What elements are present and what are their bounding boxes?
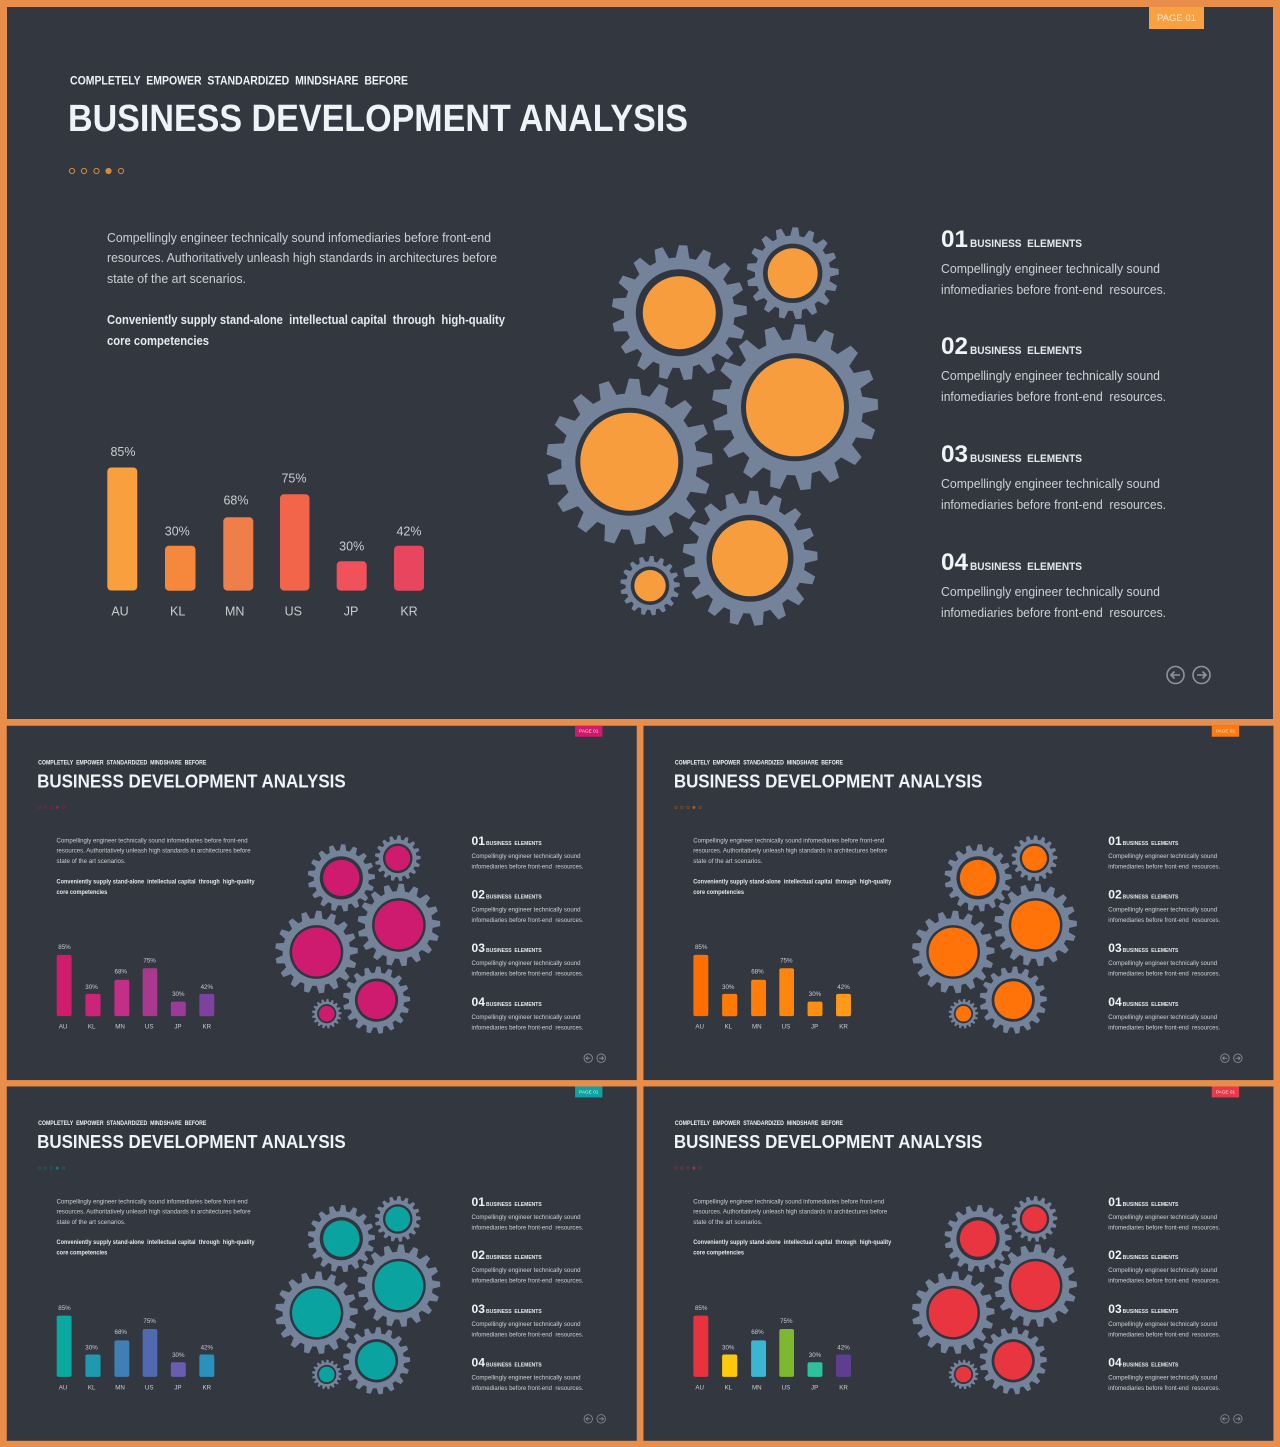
bar chart: KL <box>170 604 185 618</box>
bar chart: 68% <box>115 968 127 975</box>
element list: Compellingly engineer technically sound <box>1108 853 1218 860</box>
bar chart: 30% <box>165 524 190 538</box>
bar chart: 30% <box>809 1352 822 1359</box>
bar chart: KL <box>725 1024 733 1031</box>
element list: BUSINESS ELEMENTS <box>1123 841 1179 847</box>
intro text: Conveniently supply stand-alone intellectual capital through high-quality <box>107 313 505 327</box>
element list: 04 <box>472 1356 485 1370</box>
element list: Compellingly engineer technically sound <box>941 369 1160 383</box>
element list: 01 <box>1108 1195 1122 1209</box>
bar chart: 85% <box>110 445 136 459</box>
bar chart: 42% <box>837 1344 850 1351</box>
gear cluster <box>543 225 881 629</box>
title: BUSINESS DEVELOPMENT ANALYSIS <box>68 98 688 140</box>
element list: BUSINESS ELEMENTS <box>1123 1363 1179 1369</box>
bar chart: KR <box>400 604 418 618</box>
element list: BUSINESS ELEMENTS <box>1123 1309 1179 1315</box>
bar chart: JP <box>811 1384 818 1391</box>
intro text: Conveniently supply stand-alone intellectual capital through high-quality <box>57 1239 255 1246</box>
element list: 04 <box>472 995 485 1009</box>
subtitle: COMPLETELY EMPOWER STANDARDIZED MINDSHARE BEFORE <box>38 1121 206 1127</box>
element list: Compellingly engineer technically sound <box>472 906 581 913</box>
element list: 02 <box>472 887 485 901</box>
intro text <box>693 1198 892 1257</box>
bar chart: 75% <box>143 957 156 964</box>
intro text <box>107 231 505 348</box>
element list: 01 <box>472 1195 485 1209</box>
intro text: state of the art scenarios. <box>57 1219 126 1226</box>
element list: 04 <box>941 549 969 576</box>
element list: 02 <box>472 1248 485 1262</box>
intro text <box>57 1198 255 1257</box>
page tag: PAGE 01 <box>579 1089 599 1095</box>
bar chart: US <box>782 1384 790 1391</box>
pagination dots <box>38 806 65 809</box>
subtitle: COMPLETELY EMPOWER STANDARDIZED MINDSHARE BEFORE <box>675 1121 843 1127</box>
element list: Compellingly engineer technically sound <box>1108 906 1218 913</box>
bar chart <box>693 944 851 1031</box>
element list: Compellingly engineer technically sound <box>941 585 1160 599</box>
element list: 03 <box>472 1302 485 1316</box>
intro text: state of the art scenarios. <box>57 858 126 865</box>
intro text: Compellingly engineer technically sound infomediaries before front-end <box>107 231 491 245</box>
element list <box>1108 1195 1220 1392</box>
bar chart: AU <box>59 1024 68 1031</box>
bar chart: 68% <box>115 1329 127 1336</box>
page tag: PAGE 01 <box>579 729 599 735</box>
bar chart: 68% <box>223 494 249 508</box>
page tag <box>575 1086 602 1097</box>
element list: 04 <box>1108 995 1122 1009</box>
subtitle: COMPLETELY EMPOWER STANDARDIZED MINDSHARE BEFORE <box>675 760 843 766</box>
intro text: core competencies <box>107 334 209 348</box>
bar chart: KR <box>202 1384 212 1391</box>
bar chart: MN <box>752 1384 762 1391</box>
element list: BUSINESS ELEMENTS <box>486 1363 542 1369</box>
element list: BUSINESS ELEMENTS <box>1123 1202 1179 1208</box>
bar chart: 42% <box>201 984 214 991</box>
intro text: Compellingly engineer technically sound infomediaries before front-end <box>693 1198 885 1205</box>
element list: BUSINESS ELEMENTS <box>970 561 1082 573</box>
bar chart: 75% <box>143 1318 156 1325</box>
element list: infomediaries before front-end resources. <box>472 864 584 871</box>
intro text: resources. Authoritatively unleash high standards in architectures before <box>107 251 497 265</box>
element list: Compellingly engineer technically sound <box>1108 1267 1218 1274</box>
intro text: Compellingly engineer technically sound infomediaries before front-end <box>693 838 885 845</box>
element list: infomediaries before front-end resources. <box>472 1385 584 1392</box>
title: BUSINESS DEVELOPMENT ANALYSIS <box>37 771 346 792</box>
element list: infomediaries before front-end resources. <box>472 917 584 924</box>
element list: infomediaries before front-end resources. <box>941 283 1166 297</box>
bar chart: AU <box>695 1384 705 1391</box>
intro text: resources. Authoritatively unleash high standards in architectures before <box>693 1208 888 1215</box>
bar chart: JP <box>344 604 358 618</box>
intro text: core competencies <box>693 1250 744 1257</box>
bar chart: AU <box>59 1384 68 1391</box>
element list: Compellingly engineer technically sound <box>1108 1214 1218 1221</box>
element list: 01 <box>941 226 968 253</box>
element list: 03 <box>472 941 485 955</box>
bar chart: MN <box>225 604 244 618</box>
element list: Compellingly engineer technically sound <box>941 262 1160 276</box>
element list <box>472 1195 584 1392</box>
navigation arrows <box>1221 1054 1242 1062</box>
bar chart: 85% <box>58 944 71 951</box>
bar chart <box>57 1305 214 1391</box>
bar chart: US <box>285 604 302 618</box>
pagination dots <box>675 806 702 809</box>
bar chart: 30% <box>172 991 185 998</box>
element list: infomediaries before front-end resources. <box>1108 1224 1220 1231</box>
intro text: state of the art scenarios. <box>107 272 246 286</box>
element list: Compellingly engineer technically sound <box>472 1267 581 1274</box>
intro text: core competencies <box>693 889 744 896</box>
element list: 01 <box>1108 834 1122 848</box>
intro text: Compellingly engineer technically sound infomediaries before front-end <box>57 838 248 845</box>
bar chart: US <box>145 1024 154 1031</box>
bar chart: 42% <box>201 1344 214 1351</box>
bar chart: 68% <box>751 968 764 975</box>
slide: orange variant <box>643 726 1273 1080</box>
element list: 03 <box>1108 1302 1122 1316</box>
pagination dots <box>38 1167 65 1169</box>
element list: Compellingly engineer technically sound <box>472 853 581 860</box>
element list: Compellingly engineer technically sound <box>472 1214 581 1221</box>
title: BUSINESS DEVELOPMENT ANALYSIS <box>674 1132 982 1153</box>
intro text: Conveniently supply stand-alone intellectual capital through high-quality <box>693 879 892 886</box>
element list: BUSINESS ELEMENTS <box>486 841 542 847</box>
bar chart: 75% <box>780 1318 793 1325</box>
element list: BUSINESS ELEMENTS <box>1123 894 1179 900</box>
bar chart: 85% <box>695 1305 708 1312</box>
page tag: PAGE 01 <box>1216 729 1235 735</box>
element list: Compellingly engineer technically sound <box>472 1014 581 1021</box>
bar chart <box>57 944 214 1031</box>
page tag: PAGE 01 <box>1157 13 1196 24</box>
navigation arrows <box>584 1415 605 1423</box>
element list: BUSINESS ELEMENTS <box>1123 1002 1179 1008</box>
element list <box>941 226 1166 620</box>
bar chart: US <box>145 1384 154 1391</box>
element list: infomediaries before front-end resources. <box>1108 1278 1220 1285</box>
bar chart: MN <box>115 1384 125 1391</box>
element list: Compellingly engineer technically sound <box>1108 960 1218 967</box>
element list: infomediaries before front-end resources. <box>472 971 584 978</box>
element list: infomediaries before front-end resources. <box>1108 1024 1220 1031</box>
slide: red variant <box>643 1086 1273 1441</box>
element list: 03 <box>1108 941 1122 955</box>
element list: Compellingly engineer technically sound <box>472 1321 581 1328</box>
title: BUSINESS DEVELOPMENT ANALYSIS <box>674 771 982 792</box>
intro text: resources. Authoritatively unleash high standards in architectures before <box>57 1208 251 1215</box>
gear cluster <box>910 834 1078 1035</box>
intro text: Compellingly engineer technically sound infomediaries before front-end <box>57 1198 248 1205</box>
bar chart: 30% <box>722 984 735 991</box>
bar chart: US <box>782 1024 790 1031</box>
bar chart: 75% <box>780 957 793 964</box>
navigation arrows <box>1167 666 1210 684</box>
bar chart: JP <box>174 1384 182 1391</box>
element list: BUSINESS ELEMENTS <box>970 238 1082 250</box>
bar chart: 30% <box>339 540 364 554</box>
element list: infomediaries before front-end resources. <box>1108 864 1220 871</box>
page tag <box>1212 726 1239 737</box>
page tag <box>1149 7 1204 29</box>
bar chart: KL <box>725 1384 733 1391</box>
element list: infomediaries before front-end resources. <box>1108 1331 1220 1338</box>
intro text: core competencies <box>57 889 108 896</box>
intro text: Conveniently supply stand-alone intellectual capital through high-quality <box>57 879 255 886</box>
element list: infomediaries before front-end resources. <box>472 1331 584 1338</box>
gear cluster <box>274 834 442 1035</box>
slide: main orange <box>7 7 1273 719</box>
page tag <box>575 726 602 737</box>
element list: BUSINESS ELEMENTS <box>486 1255 542 1261</box>
subtitle: COMPLETELY EMPOWER STANDARDIZED MINDSHARE BEFORE <box>38 760 206 766</box>
bar chart: 30% <box>809 991 822 998</box>
bar chart: KR <box>839 1024 848 1031</box>
element list: infomediaries before front-end resources. <box>1108 917 1220 924</box>
element list: Compellingly engineer technically sound <box>472 1375 581 1382</box>
intro text: state of the art scenarios. <box>693 1219 763 1226</box>
bar chart: 42% <box>396 524 422 538</box>
intro text: core competencies <box>57 1250 108 1257</box>
bar chart: 85% <box>695 944 708 951</box>
element list: infomediaries before front-end resources. <box>941 606 1166 620</box>
element list: BUSINESS ELEMENTS <box>970 345 1082 357</box>
bar chart: 30% <box>85 984 98 991</box>
bar chart: JP <box>174 1024 182 1031</box>
bar chart: 68% <box>751 1329 764 1336</box>
bar chart: MN <box>115 1024 125 1031</box>
element list: 02 <box>1108 887 1122 901</box>
bar chart <box>107 445 424 618</box>
element list: Compellingly engineer technically sound <box>1108 1014 1218 1021</box>
bar chart: 85% <box>58 1305 71 1312</box>
element list: BUSINESS ELEMENTS <box>486 1309 542 1315</box>
element list: 03 <box>941 441 968 468</box>
page tag <box>1212 1086 1239 1097</box>
gear cluster <box>274 1195 442 1396</box>
bar chart: 30% <box>85 1344 98 1351</box>
element list: 01 <box>472 834 485 848</box>
gear cluster <box>910 1195 1078 1396</box>
element list: Compellingly engineer technically sound <box>1108 1375 1218 1382</box>
element list: infomediaries before front-end resources. <box>941 498 1166 512</box>
page tag: PAGE 01 <box>1216 1089 1235 1095</box>
element list: BUSINESS ELEMENTS <box>970 453 1082 465</box>
bar chart: KL <box>88 1024 96 1031</box>
slide: magenta variant <box>7 726 637 1080</box>
bar chart: AU <box>695 1024 705 1031</box>
subtitle: COMPLETELY EMPOWER STANDARDIZED MINDSHARE BEFORE <box>70 74 408 88</box>
bar chart: KR <box>839 1384 848 1391</box>
element list: 02 <box>1108 1248 1122 1262</box>
bar chart: 30% <box>172 1352 185 1359</box>
bar chart: JP <box>811 1024 818 1031</box>
element list: BUSINESS ELEMENTS <box>1123 1255 1179 1261</box>
intro text: Conveniently supply stand-alone intellectual capital through high-quality <box>693 1239 892 1246</box>
bar chart: MN <box>752 1024 762 1031</box>
pagination dots <box>675 1167 702 1169</box>
element list: infomediaries before front-end resources. <box>941 390 1166 404</box>
element list: BUSINESS ELEMENTS <box>486 948 542 954</box>
pagination dots <box>69 168 124 174</box>
element list: BUSINESS ELEMENTS <box>486 1002 542 1008</box>
bar chart: AU <box>111 604 129 618</box>
intro text <box>693 838 892 896</box>
element list: BUSINESS ELEMENTS <box>486 1202 542 1208</box>
element list: 04 <box>1108 1356 1122 1370</box>
bar chart: 42% <box>837 984 850 991</box>
bar chart <box>693 1305 851 1391</box>
element list: BUSINESS ELEMENTS <box>1123 948 1179 954</box>
intro text: resources. Authoritatively unleash high standards in architectures before <box>693 848 888 855</box>
element list: infomediaries before front-end resources. <box>472 1224 584 1231</box>
bar chart: KR <box>202 1024 212 1031</box>
navigation arrows <box>1221 1415 1242 1423</box>
element list: infomediaries before front-end resources. <box>1108 971 1220 978</box>
element list <box>1108 834 1220 1031</box>
bar chart: KL <box>88 1384 96 1391</box>
slide: teal variant <box>7 1086 637 1441</box>
element list: 02 <box>941 333 968 360</box>
element list: infomediaries before front-end resources. <box>472 1278 584 1285</box>
intro text <box>57 838 255 896</box>
intro text: resources. Authoritatively unleash high standards in architectures before <box>57 848 251 855</box>
title: BUSINESS DEVELOPMENT ANALYSIS <box>37 1132 346 1153</box>
element list: BUSINESS ELEMENTS <box>486 894 542 900</box>
bar chart: 75% <box>281 472 307 486</box>
element list: infomediaries before front-end resources. <box>1108 1385 1220 1392</box>
element list <box>472 834 584 1031</box>
navigation arrows <box>584 1054 605 1062</box>
element list: Compellingly engineer technically sound <box>1108 1321 1218 1328</box>
element list: Compellingly engineer technically sound <box>472 960 581 967</box>
element list: infomediaries before front-end resources. <box>472 1024 584 1031</box>
bar chart: 30% <box>722 1344 735 1351</box>
element list: Compellingly engineer technically sound <box>941 477 1160 491</box>
intro text: state of the art scenarios. <box>693 858 763 865</box>
